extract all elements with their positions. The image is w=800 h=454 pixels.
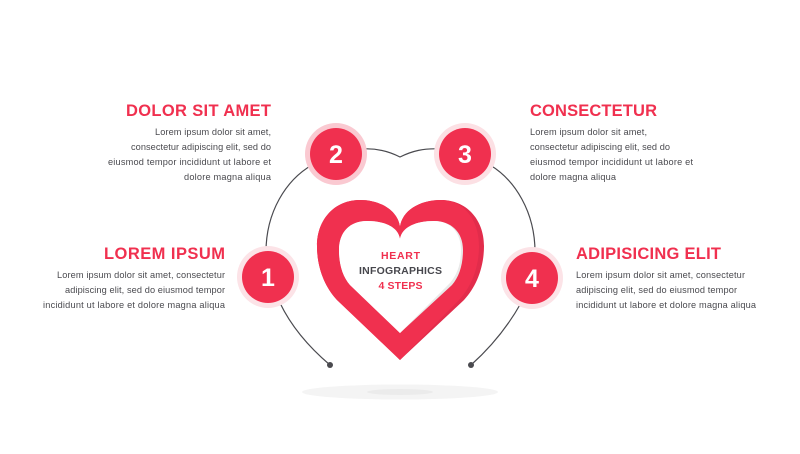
heart center text: 4 STEPS xyxy=(378,280,422,292)
text block: consectetur: consectetur adipiscing elit, sed do xyxy=(530,142,670,152)
step 2 badge xyxy=(305,123,367,185)
step 1 badge: 1 xyxy=(261,264,275,292)
step 4 badge: 4 xyxy=(525,265,539,293)
text block: adipisicing elit: adipiscing elit, sed do eiusmod tempor xyxy=(576,285,737,295)
text block: consectetur: eiusmod tempor incididunt ut labore et xyxy=(530,157,693,167)
text block: lorem ipsum: Lorem ipsum dolor sit amet, consectetur xyxy=(57,270,225,280)
text block: lorem ipsum: LOREM IPSUM xyxy=(104,245,225,263)
text block: dolor sit amet: consectetur adipiscing elit, sed do xyxy=(131,142,271,152)
text block: dolor sit amet: Lorem ipsum dolor sit amet, xyxy=(155,127,271,137)
text block: lorem ipsum xyxy=(43,245,226,310)
text block: adipisicing elit: Lorem ipsum dolor sit amet, consectetur xyxy=(576,270,745,280)
step 1 badge xyxy=(237,246,299,308)
text block: dolor sit amet xyxy=(108,102,272,182)
heart xyxy=(317,200,484,360)
text block: consectetur xyxy=(530,102,693,182)
text block: adipisicing elit: ADIPISICING ELIT xyxy=(576,245,721,263)
step 2 badge: 2 xyxy=(329,141,343,169)
connector lines and end dots xyxy=(266,149,535,368)
text block: consectetur: Lorem ipsum dolor sit amet, xyxy=(530,127,647,137)
text block: adipisicing elit xyxy=(576,245,757,310)
step 3 badge xyxy=(434,123,496,185)
text block: adipisicing elit: incididunt ut labore et dolore magna aliqua xyxy=(576,300,757,310)
text block: dolor sit amet: eiusmod tempor incididunt ut labore et xyxy=(108,157,271,167)
heart center text: HEART xyxy=(381,250,421,262)
ground shadow under heart xyxy=(302,384,498,400)
text block: consectetur: CONSECTETUR xyxy=(530,102,657,120)
text block: dolor sit amet: DOLOR SIT AMET xyxy=(126,102,271,120)
text block: dolor sit amet: dolore magna aliqua xyxy=(184,172,272,182)
step 4 badge xyxy=(501,247,563,309)
text block: consectetur: dolore magna aliqua xyxy=(530,172,617,182)
heart center text: INFOGRAPHICS xyxy=(359,265,442,277)
text block: lorem ipsum: incididunt ut labore et dolore magna aliqua xyxy=(43,300,226,310)
text block: lorem ipsum: adipiscing elit, sed do eiusmod tempor xyxy=(65,285,225,295)
heart center text xyxy=(359,250,442,292)
step 3 badge: 3 xyxy=(458,141,472,169)
